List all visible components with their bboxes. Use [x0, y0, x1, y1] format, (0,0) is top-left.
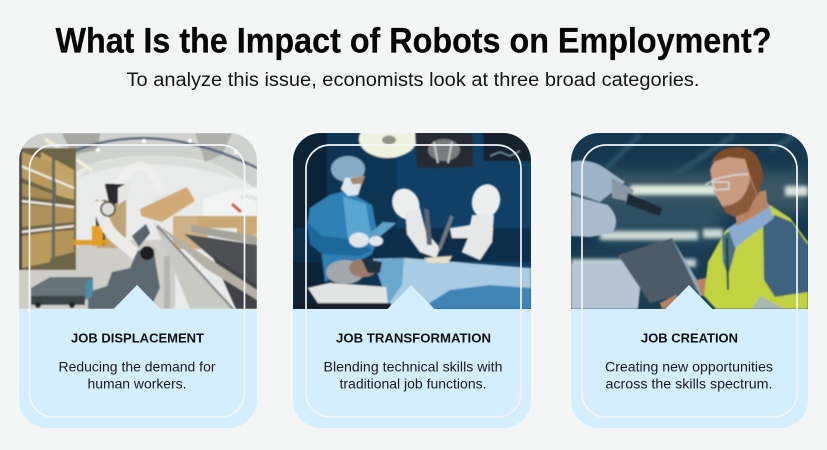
AGV cart — [31, 277, 93, 300]
robot base — [571, 262, 641, 309]
description: Reducing the demand for — [58, 360, 216, 375]
factory lights — [630, 185, 725, 195]
floor — [19, 240, 175, 309]
panel: job creation — [571, 133, 808, 428]
patient drape — [373, 258, 531, 309]
incision site — [424, 256, 452, 263]
hands — [659, 294, 678, 309]
engineer neck and head — [733, 190, 768, 226]
pointer triangle — [113, 285, 161, 310]
description: Blending technical skills with — [324, 360, 502, 375]
gripper — [161, 197, 162, 198]
heading: JOB DISPLACEMENT — [71, 331, 204, 346]
subtitle: To analyze this issue, economists look at three broad categories. — [126, 69, 700, 91]
description: human workers. — [88, 376, 186, 392]
inner outline — [582, 145, 797, 417]
pointer triangle — [665, 285, 713, 310]
shelving — [19, 148, 76, 270]
surgeon head — [331, 156, 365, 182]
description — [324, 360, 502, 392]
forklift and stock — [97, 200, 126, 248]
robotic arm left — [391, 188, 421, 220]
tablet and gloves — [367, 222, 396, 238]
heading: JOB CREATION — [641, 331, 738, 346]
white room and boxes — [202, 186, 257, 217]
robot arm — [100, 206, 136, 255]
pointer triangle — [387, 285, 435, 310]
heading: JOB TRANSFORMATION — [336, 331, 491, 346]
inner outline — [306, 145, 521, 417]
conveyor near rail — [155, 225, 232, 309]
title: What Is the Impact of Robots on Employment? — [56, 22, 772, 60]
panel: job transformation — [293, 120, 531, 428]
robotic arm right — [470, 183, 502, 216]
engineer jacket — [704, 205, 808, 309]
carried box — [140, 187, 195, 222]
description: across the skills spectrum. — [606, 376, 772, 392]
card background — [571, 133, 808, 428]
conveyor belt — [184, 234, 257, 290]
patient head — [326, 260, 364, 284]
robot lower arm — [571, 195, 616, 237]
pillow — [308, 283, 388, 303]
description — [605, 360, 773, 392]
laptop — [618, 238, 700, 303]
photo: warehouse robot arm — [19, 133, 257, 309]
description: traditional job functions. — [340, 376, 486, 392]
inner outline — [30, 145, 244, 417]
monitors — [415, 133, 473, 168]
description: Creating new opportunities — [605, 360, 773, 375]
photo: engineer with laptop and robot — [571, 133, 808, 309]
surgical lamp — [358, 133, 417, 160]
gripper — [626, 193, 662, 216]
card background — [19, 133, 257, 428]
description — [58, 360, 216, 392]
surgeon body — [307, 191, 378, 282]
robot base — [132, 224, 150, 247]
photo: robotic surgery — [293, 120, 531, 309]
card background — [293, 133, 531, 428]
robot upper arm — [571, 161, 625, 202]
roof — [19, 133, 257, 190]
panel: job displacement — [19, 133, 257, 428]
